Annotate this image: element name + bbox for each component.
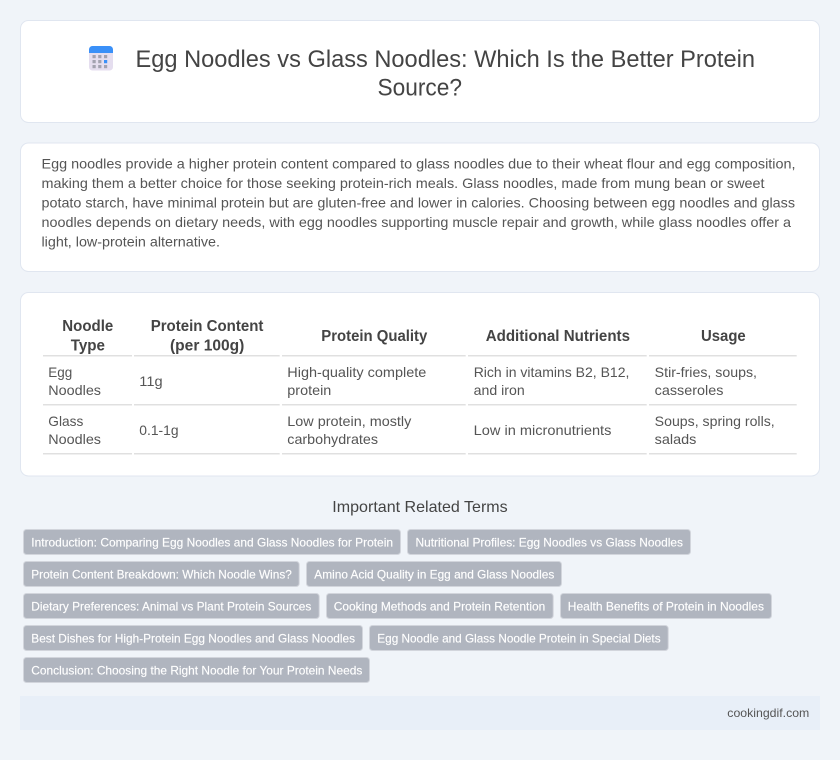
tag: best dishes: Best Dishes for High-Protein Egg Noodles and Glass Noodles [31,631,355,645]
table header row: Protein Quality [321,328,427,345]
tag: cooking methods [326,594,553,618]
table row: egg noodles: Stir-fries, soups, [655,364,757,380]
related term tags [24,530,772,682]
tag: dietary preferences: Dietary Preferences: Animal vs Plant Protein Sources [31,599,311,613]
table row: glass noodles [48,413,775,447]
tag: health benefits: Health Benefits of Protein in Noodles [568,599,764,613]
table row: glass noodles: Low protein, mostly [287,413,411,429]
intro paragraph: potato starch, have minimal protein but are gluten-free and lower in calories. Choosing between egg noodles and glass [42,194,795,210]
tag: introduction: Introduction: Comparing Egg Noodles and Glass Noodles for Protein [31,535,393,549]
footer bar [20,696,820,730]
icon: calendar [89,46,113,70]
tag: conclusion [24,658,370,682]
tag: protein content breakdown: Protein Content Breakdown: Which Noodle Wins? [31,567,292,581]
tag: introduction [24,530,400,554]
tag: nutritional profiles: Nutritional Profiles: Egg Noodles vs Glass Noodles [416,535,683,549]
title: Egg Noodles vs Glass Noodles: Which Is the Better Protein [136,46,755,73]
table row: egg noodles: and iron [474,382,525,398]
table row: egg noodles: casseroles [655,382,723,398]
table header row: Additional Nutrients [486,328,630,345]
table row: glass noodles: Glass [48,413,83,429]
intro paragraph: noodles depends on dietary needs, with egg noodles supporting muscle repair and growth, while glass noodles offer a [42,214,791,230]
table row: glass noodles: Noodles [48,431,101,447]
table header row: Type [71,338,105,354]
panel: comparison table [20,292,820,476]
header panel [20,20,820,122]
title: Source? [378,74,462,102]
tag: conclusion: Conclusion: Choosing the Right Noodle for Your Protein Needs [31,663,362,677]
tag: special diets: Egg Noodle and Glass Noodle Protein in Special Diets [377,631,661,645]
tag: protein content breakdown [24,562,299,586]
table row: glass noodles: Low in micronutrients [474,422,611,438]
footer source text: cookingdif.com [727,706,809,720]
table row: egg noodles: Egg [48,364,72,380]
intro paragraph: Egg noodles provide a higher protein content compared to glass noodles due to their wheat flour and egg composition, [42,155,796,171]
table header row: Protein Content [151,318,264,335]
tag: special diets [370,626,668,650]
heading: important related terms: Important Related Terms [332,499,508,516]
panel: introduction [20,143,820,272]
table row: glass noodles: salads [655,431,696,447]
intro paragraph: making them a better choice for those seeking protein-rich meals. Glass noodles, made from mung bean or sweet [42,175,765,191]
table row: glass noodles: 0.1-1g [139,422,179,438]
tag: amino acid quality: Amino Acid Quality in Egg and Glass Noodles [314,567,554,581]
tag: cooking methods: Cooking Methods and Protein Retention [334,599,545,613]
table row: egg noodles [48,364,757,398]
table header row [62,318,746,354]
table header row: Noodle [62,318,113,335]
table row: egg noodles: protein [287,382,331,398]
table row: egg noodles: Noodles [48,382,101,398]
intro paragraph [42,155,796,250]
tag: best dishes [24,626,362,650]
tag: nutritional profiles [408,530,690,554]
title [136,46,755,102]
tag: amino acid quality [306,562,562,586]
table header row: Usage [701,328,746,345]
tag: dietary preferences [24,594,319,618]
table row: glass noodles: carbohydrates [287,431,378,447]
table row: egg noodles: 11g [139,373,163,389]
table row: egg noodles: High-quality complete [287,364,427,380]
intro paragraph: light, low-protein alternative. [42,234,220,250]
table row: egg noodles: Rich in vitamins B2, B12, [474,364,629,380]
table row: glass noodles: Soups, spring rolls, [655,413,775,429]
table header row: (per 100g) [170,338,244,354]
tag: health benefits [560,594,772,618]
